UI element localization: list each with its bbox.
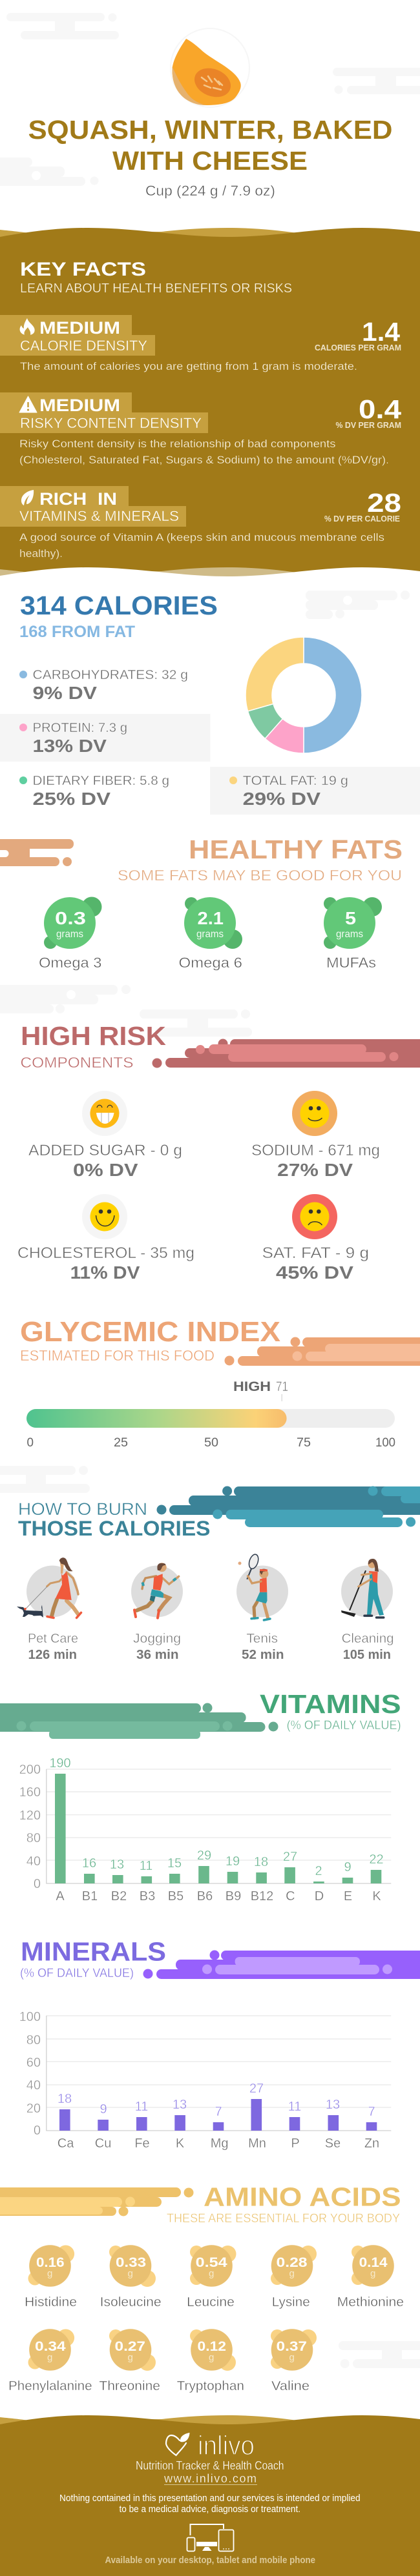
bar chart: vitamins: 9	[344, 1860, 352, 1874]
amino: tryptophan: g	[209, 2352, 214, 2363]
amino: tryptophan	[177, 2329, 244, 2393]
heading: amino acids: THESE ARE ESSENTIAL FOR YOUR BODY	[167, 2211, 400, 2226]
value label: HIGH	[233, 1379, 271, 1394]
availability note: Available on your desktop, tablet and mobile phone	[105, 2555, 315, 2566]
fact: rich in vitamins and minerals: RICH IN	[39, 489, 117, 509]
activity: jogging: 36 min	[136, 1648, 178, 1662]
legend: carbohydrates	[19, 668, 188, 703]
bar chart: minerals: Zn	[364, 2136, 379, 2151]
bar chart: vitamins: A	[56, 1889, 65, 1903]
component: cholesterol: 11% DV	[70, 1263, 140, 1283]
fact: risky content density: (Cholesterol, Saturated Fat, Sugars & Sodium) to the amount (%DV/gr).	[19, 454, 389, 466]
bar chart: vitamins: K	[372, 1889, 381, 1903]
bar chart: vitamins: 80	[26, 1831, 41, 1845]
bar chart: minerals: 11	[288, 2100, 301, 2114]
activity: cleaning: Cleaning	[342, 1632, 394, 1646]
stat: omega 6	[178, 897, 242, 971]
gauge scale	[27, 1436, 395, 1450]
decorative blob: high risk	[152, 1039, 420, 1068]
activity: pet care: Pet Care	[28, 1632, 78, 1646]
bar chart: vitamins: B5	[168, 1889, 184, 1903]
bar chart: minerals: P	[291, 2136, 300, 2151]
bar chart: minerals: Se	[325, 2136, 341, 2151]
heading: amino acids: AMINO ACIDS	[204, 2182, 401, 2211]
website link: www.inlivo.com	[163, 2472, 257, 2485]
heading: minerals	[20, 1937, 166, 1980]
icon: flame	[20, 318, 35, 335]
amino: tryptophan: 0.12	[198, 2339, 226, 2354]
legend: protein: PROTEIN: 7.3 g	[32, 721, 127, 735]
gauge scale: 50	[204, 1436, 218, 1450]
amino: isoleucine: 0.33	[116, 2255, 146, 2270]
logo: inlivo	[198, 2430, 255, 2460]
panel: amino acids	[0, 2182, 420, 2393]
panel: glycemic index	[20, 1316, 420, 1450]
bar chart: vitamins: 2	[315, 1864, 322, 1878]
amino: histidine: Histidine	[25, 2295, 77, 2309]
component: sodium: SODIUM - 671 mg	[251, 1142, 380, 1159]
activity: pet care	[17, 1557, 81, 1662]
amino: histidine: g	[47, 2268, 52, 2279]
activity: cleaning: 105 min	[343, 1648, 391, 1662]
panel: vitamins	[0, 1689, 401, 1903]
amino: lysine: g	[289, 2268, 295, 2279]
stat: omega 3: Omega 3	[39, 955, 102, 971]
bar chart: vitamins: E	[344, 1889, 352, 1903]
fact: calorie density: 1.4	[362, 317, 400, 347]
bar chart: minerals: 20	[26, 2102, 41, 2116]
fact: risky content density: Risky Content density is the relationship of bad components	[19, 438, 336, 450]
bar chart: vitamins: 0	[34, 1877, 41, 1891]
component: added sugar	[28, 1091, 182, 1180]
bar chart: minerals: 0	[34, 2124, 41, 2138]
amino: isoleucine	[100, 2245, 162, 2309]
bar chart: minerals: 13	[326, 2098, 340, 2112]
fact: rich in vitamins and minerals	[0, 486, 401, 560]
heading: healthy fats	[118, 835, 403, 884]
amino: methionine: g	[370, 2268, 375, 2279]
amino: valine: Valine	[271, 2379, 310, 2393]
serving size: Cup (224 g / 7.9 oz)	[145, 183, 275, 199]
stat: omega 6: 2.1	[198, 908, 224, 928]
stat: mufas: 5	[345, 908, 356, 928]
fact: calorie density	[0, 315, 401, 372]
bar chart: vitamins: 19	[226, 1854, 240, 1869]
bar chart: vitamins: 120	[19, 1809, 41, 1823]
title: SQUASH, WINTER, BAKED	[28, 115, 393, 145]
fact: calorie density: MEDIUM	[39, 318, 120, 338]
decorative blob: vitamins	[0, 1703, 278, 1739]
title: WITH CHEESE	[112, 146, 308, 176]
amino: leucine: 0.54	[196, 2255, 227, 2270]
amino: phenylalanine	[8, 2329, 92, 2393]
bar chart: vitamins: 190	[49, 1756, 71, 1770]
bar chart: vitamins: 200	[19, 1763, 41, 1777]
icon: big smile face	[82, 1194, 127, 1239]
heading: burn: HOW TO BURN	[18, 1499, 147, 1519]
heading: key facts: KEY FACTS	[20, 259, 146, 280]
heading: healthy fats: SOME FATS MAY BE GOOD FOR YOU	[118, 867, 402, 884]
amino: leucine: g	[209, 2268, 214, 2279]
stat: omega 6: Omega 6	[178, 955, 242, 971]
bar chart: vitamins: 29	[197, 1849, 211, 1863]
bar chart: vitamins: B3	[140, 1889, 155, 1903]
fact: calorie density: CALORIES PER GRAM	[315, 343, 401, 352]
amino: valine: g	[289, 2352, 295, 2363]
activity: tennis: Tenis	[246, 1632, 278, 1646]
legend: dietary fiber	[19, 774, 169, 809]
bar chart: vitamins: B6	[197, 1889, 213, 1903]
bar chart: vitamins: 18	[254, 1855, 268, 1869]
component: sodium: 27% DV	[277, 1160, 353, 1180]
bar chart: vitamins: 13	[110, 1858, 124, 1872]
amino: leucine	[187, 2245, 236, 2309]
decorative blob: amino acids	[0, 2187, 194, 2216]
activity: tennis	[236, 1553, 288, 1662]
fact: calorie density: CALORIE DENSITY	[20, 338, 147, 354]
amino: histidine	[25, 2245, 77, 2309]
fact: rich in vitamins and minerals: % DV PER CALORIE	[324, 514, 400, 523]
gauge bar	[26, 1409, 395, 1428]
tagline: Nutrition Tracker & Health Coach	[136, 2459, 284, 2472]
header panel	[0, 13, 420, 199]
legend: protein	[0, 714, 211, 762]
amino: valine: 0.37	[277, 2339, 307, 2354]
amino: lysine	[271, 2245, 317, 2309]
bar chart: minerals: K	[176, 2136, 185, 2151]
component: added sugar: ADDED SUGAR - 0 g	[28, 1142, 182, 1159]
fact: rich in vitamins and minerals: A good source of Vitamin A (keeps skin and mucous membrane cells	[19, 531, 384, 543]
amino: methionine	[337, 2245, 404, 2309]
fact: risky content density: % DV PER GRAM	[336, 420, 401, 430]
bar chart: vitamins: B1	[82, 1889, 98, 1903]
fact: rich in vitamins and minerals: VITAMINS & MINERALS	[19, 508, 179, 524]
heading: calories	[19, 591, 218, 641]
bar chart: vitamins: 160	[19, 1785, 41, 1800]
value label	[233, 1379, 288, 1401]
amino: leucine: Leucine	[187, 2295, 235, 2309]
stat: mufas: grams	[336, 929, 363, 940]
fact: risky content density: MEDIUM	[39, 396, 120, 415]
decorative blob: healthy fats	[0, 839, 74, 866]
legend: total fat: TOTAL FAT: 19 g	[243, 774, 348, 788]
heading: high risk	[21, 1021, 166, 1071]
bar chart: minerals: 40	[26, 2078, 41, 2093]
activity: tennis: 52 min	[242, 1648, 284, 1662]
bar chart: vitamins	[19, 1756, 391, 1903]
icon: leaf	[21, 490, 34, 505]
icon: frowning face	[292, 1194, 337, 1239]
component: saturated fat: 45% DV	[276, 1263, 354, 1283]
title	[28, 115, 393, 176]
panel: high risk components	[0, 985, 420, 1283]
amino: phenylalanine: g	[47, 2352, 52, 2363]
heading: calories: 168 FROM FAT	[19, 623, 135, 641]
fact: risky content density: RISKY CONTENT DENSITY	[20, 415, 202, 431]
heading: amino acids	[167, 2182, 401, 2226]
bar chart: minerals: Cu	[95, 2136, 111, 2151]
legend: total fat	[210, 767, 420, 815]
fact: risky content density: 0.4	[359, 394, 401, 424]
amino: threonine	[99, 2329, 160, 2393]
activity: cleaning	[341, 1559, 394, 1662]
stat: mufas	[324, 897, 382, 971]
bar chart: vitamins: B12	[251, 1889, 273, 1903]
bar chart: vitamins: C	[286, 1889, 295, 1903]
activity: pet care: 126 min	[28, 1648, 77, 1662]
amino: methionine: 0.14	[359, 2255, 388, 2270]
decorative blob: burn	[156, 1486, 420, 1527]
decorative blob: glycemic index	[225, 1337, 420, 1366]
gauge scale: 0	[27, 1436, 34, 1450]
bar chart: vitamins: 40	[26, 1854, 41, 1869]
bar chart: minerals	[19, 2010, 391, 2151]
panel: key facts	[0, 228, 420, 584]
heading: vitamins: VITAMINS	[260, 1689, 401, 1719]
icon: man jogging	[131, 1563, 183, 1618]
amino: threonine: g	[128, 2352, 133, 2363]
amino: phenylalanine: 0.34	[35, 2339, 66, 2354]
bar chart: vitamins: D	[315, 1889, 324, 1903]
legend: total fat: 29% DV	[243, 789, 321, 809]
gauge scale: 100	[375, 1436, 395, 1450]
bar chart: vitamins: 22	[369, 1852, 384, 1867]
logo	[166, 2430, 255, 2460]
heading: high risk: COMPONENTS	[21, 1054, 133, 1071]
bar chart: minerals: 7	[368, 2105, 375, 2119]
amino: methionine: Methionine	[337, 2295, 404, 2309]
bar chart: minerals: 27	[249, 2082, 264, 2096]
bar chart: minerals: 9	[100, 2102, 107, 2116]
bar chart: minerals: Fe	[134, 2136, 150, 2151]
bar chart: minerals: 11	[135, 2100, 148, 2114]
gauge scale: 25	[114, 1436, 128, 1450]
amino: tryptophan: Tryptophan	[177, 2379, 244, 2393]
component: saturated fat	[262, 1194, 369, 1283]
legend: dietary fiber: 25% DV	[32, 789, 111, 809]
activity: jogging	[131, 1563, 183, 1662]
stat: omega 6: grams	[196, 929, 224, 940]
icon: warning triangle	[19, 396, 37, 412]
bar chart: vitamins: 27	[283, 1850, 297, 1864]
heading: healthy fats: HEALTHY FATS	[189, 835, 403, 864]
heading: key facts	[20, 259, 292, 296]
panel: how to burn those calories	[0, 1466, 420, 1662]
panel: calories	[0, 591, 420, 815]
heading: calories: 314 CALORIES	[20, 591, 218, 620]
disclaimer	[59, 2493, 361, 2515]
decorative blob: minerals	[143, 1951, 420, 1979]
heading: burn: THOSE CALORIES	[18, 1517, 211, 1540]
stat: omega 3	[39, 897, 102, 971]
bar chart: vitamins: 11	[140, 1859, 152, 1873]
amino: lysine: 0.28	[277, 2255, 308, 2270]
value label: 71	[276, 1379, 288, 1394]
fact: calorie density: The amount of calories you are getting from 1 gram is moderate.	[20, 360, 357, 372]
legend: protein: 13% DV	[32, 736, 107, 756]
heading: minerals: MINERALS	[21, 1937, 166, 1967]
icon: woman sweeping	[341, 1559, 393, 1618]
component: cholesterol: CHOLESTEROL - 35 mg	[17, 1244, 194, 1262]
component: added sugar: 0% DV	[73, 1160, 138, 1180]
disclaimer: Nothing contained in this presentation and our services is intended or implied	[59, 2493, 361, 2504]
fact: rich in vitamins and minerals: 28	[367, 488, 401, 518]
bar chart: minerals: Mn	[248, 2136, 266, 2151]
heading: high risk: HIGH RISK	[21, 1021, 166, 1051]
legend: dietary fiber: DIETARY FIBER: 5.8 g	[32, 774, 169, 788]
bar chart: minerals: 100	[19, 2010, 41, 2024]
stat: mufas: MUFAs	[326, 955, 376, 971]
fact: risky content density	[0, 392, 401, 466]
component: sodium	[251, 1091, 380, 1180]
activity: jogging: Jogging	[133, 1632, 181, 1646]
stat: omega 3: 0.3	[55, 908, 86, 928]
legend: carbohydrates: 9% DV	[32, 683, 98, 703]
bar chart: minerals: Ca	[58, 2136, 74, 2151]
icon: grinning face	[82, 1091, 127, 1136]
panel: footer	[0, 2415, 420, 2576]
legend: carbohydrates: CARBOHYDRATES: 32 g	[32, 668, 188, 682]
amino: histidine: 0.16	[36, 2255, 65, 2270]
component: cholesterol	[17, 1194, 194, 1283]
bar chart: minerals: 7	[215, 2105, 222, 2119]
bar chart: vitamins: B9	[226, 1889, 241, 1903]
heading: vitamins: (% OF DAILY VALUE)	[287, 1718, 401, 1732]
disclaimer: to be a medical advice, diagnosis or treatment.	[119, 2504, 300, 2515]
donut chart	[246, 637, 362, 753]
amino: lysine: Lysine	[272, 2295, 310, 2309]
icon: squash wedge in circle	[171, 28, 249, 107]
heading: glycemic index	[20, 1316, 280, 1364]
icon: woman walking dog	[17, 1557, 81, 1618]
bar chart: vitamins: B2	[111, 1889, 127, 1903]
bar chart: minerals: 60	[26, 2056, 41, 2070]
fact: rich in vitamins and minerals: healthy).	[19, 547, 63, 560]
bar chart: vitamins: 15	[167, 1856, 182, 1871]
heading: burn	[18, 1499, 211, 1540]
stat: omega 3: grams	[56, 929, 83, 940]
heading: key facts: LEARN ABOUT HEALTH BENEFITS OR RISKS	[20, 281, 292, 296]
icon: tennis player	[236, 1553, 288, 1620]
amino: isoleucine: g	[128, 2268, 133, 2279]
icon: devices	[187, 2524, 234, 2551]
gauge scale: 75	[297, 1436, 311, 1450]
bar chart: vitamins: 16	[82, 1856, 96, 1871]
amino: valine	[271, 2329, 317, 2393]
amino: phenylalanine: Phenylalanine	[8, 2379, 92, 2393]
heading: minerals: (% OF DAILY VALUE)	[20, 1966, 134, 1980]
component: saturated fat: SAT. FAT - 9 g	[262, 1244, 369, 1262]
heading: glycemic index: ESTIMATED FOR THIS FOOD	[20, 1347, 215, 1364]
bar chart: minerals: Mg	[211, 2136, 228, 2151]
bar chart: minerals: 80	[26, 2033, 41, 2047]
icon: smiling face	[292, 1091, 337, 1136]
amino: isoleucine: Isoleucine	[100, 2295, 162, 2309]
amino: threonine: 0.27	[115, 2339, 145, 2354]
heading: vitamins	[260, 1689, 401, 1732]
bar chart: minerals: 13	[173, 2098, 187, 2112]
panel: minerals	[19, 1937, 420, 2151]
amino: threonine: Threonine	[99, 2379, 160, 2393]
bar chart: minerals: 18	[58, 2092, 72, 2106]
panel: healthy fats	[0, 835, 403, 971]
heading: glycemic index: GLYCEMIC INDEX	[20, 1316, 280, 1348]
